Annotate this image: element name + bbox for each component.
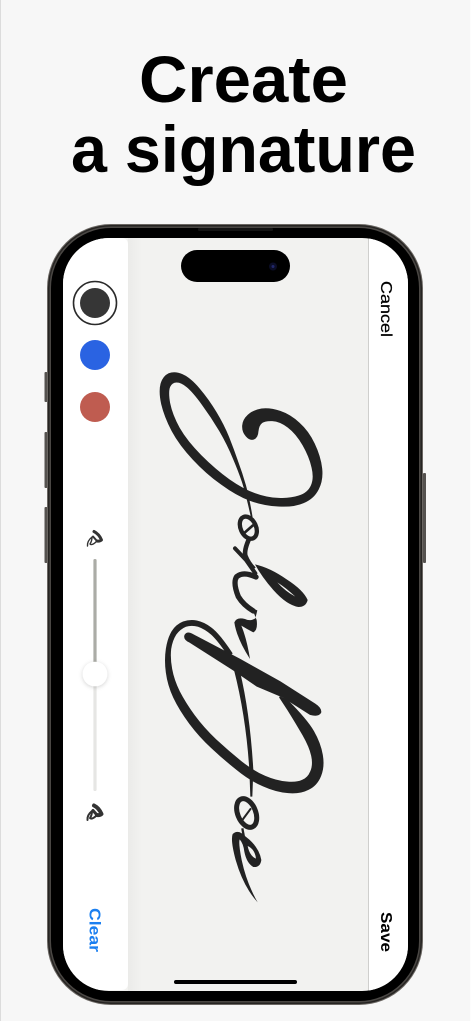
phone frame <box>47 224 423 1005</box>
title: Create <box>139 42 348 116</box>
letters ohn <box>234 514 308 659</box>
cancel button: Cancel <box>377 281 394 337</box>
letter D <box>166 621 323 797</box>
icon: thick pen <box>87 806 102 820</box>
colour swatch: red <box>80 392 110 422</box>
clear button: Clear <box>86 908 102 952</box>
panel shadow <box>128 238 142 991</box>
phone mockup <box>44 224 426 1005</box>
colour swatch: selected dark <box>74 282 116 324</box>
title: a signature <box>71 112 416 186</box>
signature: John Doe <box>160 373 323 902</box>
dynamic island <box>181 250 290 282</box>
title <box>71 42 416 186</box>
signature canvas <box>63 238 408 991</box>
phone screen <box>50 238 408 991</box>
width slider <box>83 559 107 791</box>
save button: Save <box>377 912 394 952</box>
right actions panel <box>368 238 408 991</box>
home indicator <box>174 980 297 984</box>
letters oe <box>232 796 261 902</box>
letter J <box>160 373 322 517</box>
left tools panel <box>63 238 128 990</box>
icon: thin pen <box>87 532 102 546</box>
colour swatch: blue <box>80 340 110 370</box>
side buttons <box>44 372 426 563</box>
